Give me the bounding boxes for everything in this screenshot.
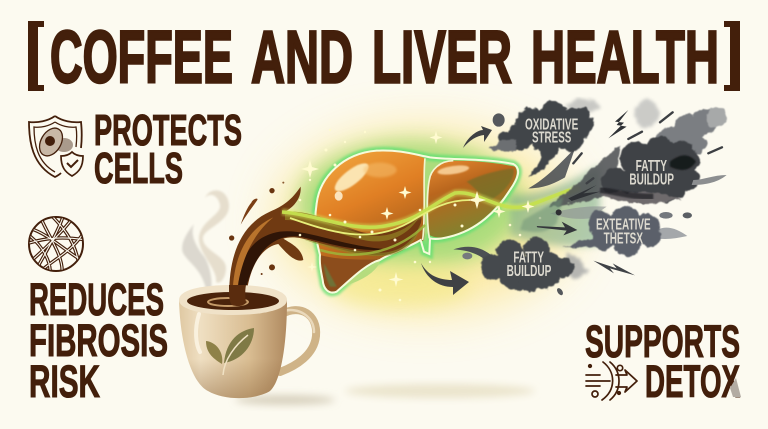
title brackets bbox=[28, 21, 740, 91]
green energy swirl bbox=[282, 188, 580, 255]
liver bbox=[315, 150, 518, 293]
title bbox=[28, 16, 740, 98]
cloud: oxidative stress: STRESS bbox=[532, 130, 571, 147]
right lobe bbox=[315, 150, 425, 293]
cloud: exteative thetsx: EXTEATIVE bbox=[596, 217, 651, 234]
table shadow bbox=[235, 384, 535, 405]
reduces fibrosis risk label: RISK bbox=[29, 356, 100, 407]
cup body bbox=[179, 300, 287, 398]
coffee stream bbox=[229, 182, 422, 298]
coffee surface bbox=[187, 292, 279, 310]
title: LIVER bbox=[372, 16, 512, 98]
fibrosis mesh icon bbox=[28, 216, 84, 272]
white outline bbox=[315, 150, 518, 293]
cloud: fatty buildup bottom bbox=[453, 237, 588, 292]
steam bbox=[182, 190, 229, 300]
left lobe bbox=[428, 161, 517, 237]
liver lower tint bbox=[320, 255, 380, 293]
reduces fibrosis risk label: REDUCES bbox=[29, 274, 164, 325]
supports detox label bbox=[585, 316, 740, 407]
cloud: fatty buildup top: FATTY bbox=[636, 158, 667, 175]
cloud: exteative thetsx: THETSX bbox=[604, 230, 643, 247]
stream base in cup bbox=[229, 285, 246, 306]
cloud: fatty buildup bottom: FATTY bbox=[513, 250, 544, 267]
sparkles bbox=[299, 129, 541, 301]
protects cells label bbox=[94, 106, 242, 193]
title: COFFEE bbox=[50, 16, 233, 98]
lightning bolts bbox=[608, 110, 628, 138]
coffee cup bbox=[179, 285, 316, 398]
cloud: fatty buildup bottom: BUILDUP bbox=[507, 263, 551, 280]
protects cells label: PROTECTS bbox=[94, 106, 242, 155]
cloud: fatty buildup top: BUILDUP bbox=[629, 171, 674, 188]
dark wisps between liver and clouds bbox=[493, 110, 722, 296]
arrow: toward fatty buildup bbox=[421, 263, 469, 295]
highlights bbox=[331, 159, 372, 196]
detox arrow icon bbox=[586, 362, 637, 400]
cloud: oxidative stress bbox=[488, 99, 599, 178]
protects cells icon bbox=[29, 116, 83, 177]
glow around liver bbox=[275, 128, 600, 312]
arrow: toward oxidative stress bbox=[463, 126, 492, 148]
cloud: exteative thetsx bbox=[537, 206, 687, 255]
reduces fibrosis risk label: FIBROSIS bbox=[29, 315, 168, 366]
protects cells label: CELLS bbox=[94, 144, 183, 193]
cloud: fatty buildup top bbox=[600, 99, 727, 204]
title: AND bbox=[251, 16, 353, 98]
green outline glow bbox=[315, 150, 518, 293]
cup handle bbox=[280, 310, 316, 372]
small grey A mark bbox=[730, 378, 741, 397]
cloud: oxidative stress: OXIDATIVE bbox=[525, 116, 578, 133]
leaf emblem bbox=[206, 328, 254, 375]
reduces fibrosis risk label bbox=[29, 274, 168, 407]
